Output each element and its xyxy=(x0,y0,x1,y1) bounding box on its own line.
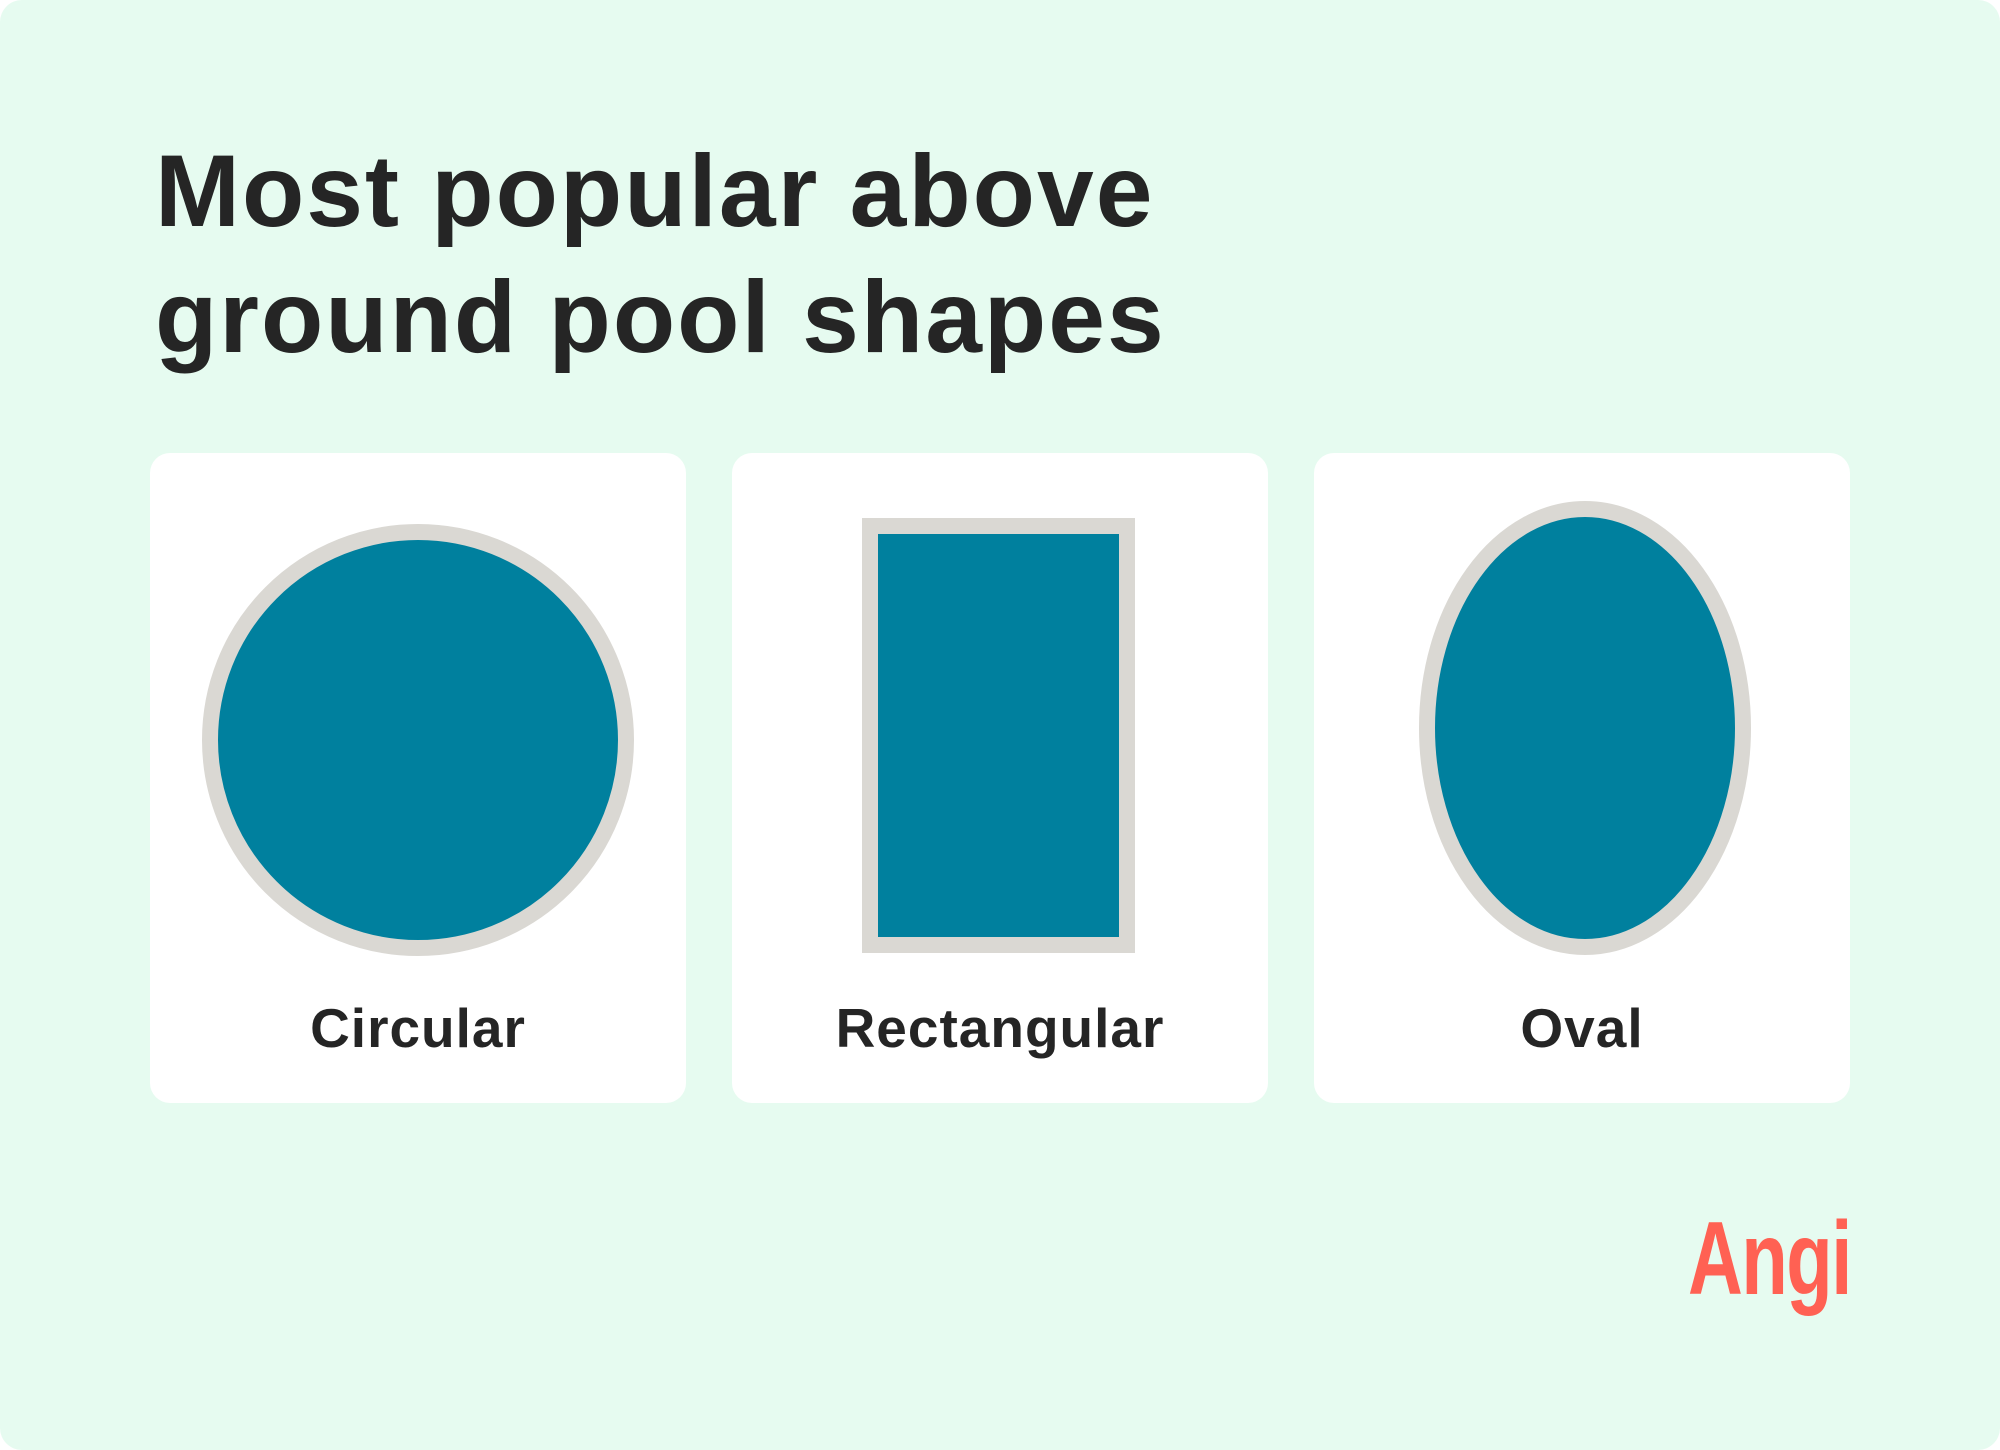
panel: oval xyxy=(1314,453,1850,1103)
label: oval: Oval xyxy=(1520,997,1644,1059)
title xyxy=(155,134,1166,374)
title: Most popular above xyxy=(155,134,1154,248)
panel: rectangular xyxy=(732,453,1268,1103)
label: circular: Circular xyxy=(310,997,526,1059)
title: ground pool shapes xyxy=(155,260,1166,374)
icon: oval pool xyxy=(1419,501,1751,955)
panel: circular xyxy=(150,453,686,1103)
logo: Angi: Angi xyxy=(1688,1201,1851,1317)
icon: rectangular pool xyxy=(862,518,1135,953)
label: rectangular: Rectangular xyxy=(836,997,1164,1059)
icon: circular pool xyxy=(202,524,634,956)
